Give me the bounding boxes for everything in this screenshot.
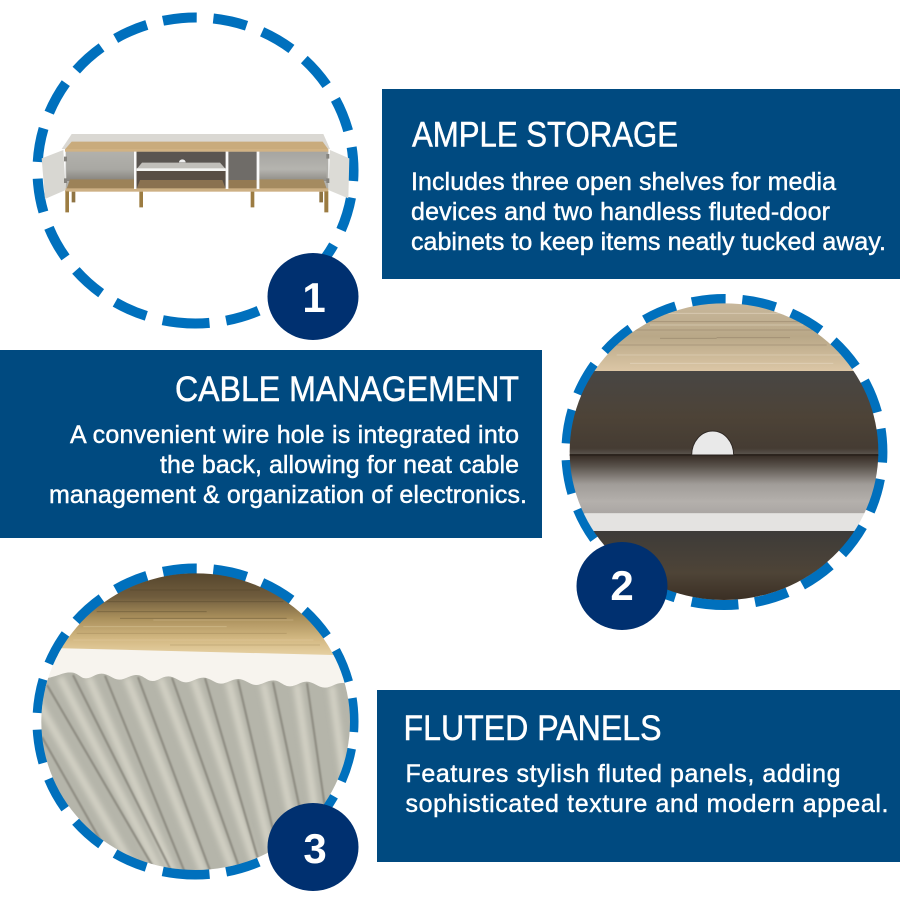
illustration: open TV stand <box>42 134 349 212</box>
text block: cable management description: A convenient wire hole is integrated into <box>70 421 519 449</box>
number badge 1 <box>268 253 358 340</box>
dashed ring: feature 2 <box>566 299 882 605</box>
wire hole <box>692 431 734 455</box>
text block: fluted panels description <box>406 760 888 818</box>
number badge 2: 2 <box>610 562 634 609</box>
illustration: wire hole close-up <box>567 302 883 601</box>
number badge 2 <box>576 542 668 630</box>
panel: cable management <box>0 350 542 538</box>
heading: fluted panels: FLUTED PANELS <box>404 709 662 748</box>
text block: ample storage description: devices and two handless fluted-door <box>411 198 830 226</box>
flute highlights <box>42 676 347 870</box>
flutes <box>41 672 350 870</box>
flute grooves <box>42 674 326 870</box>
text block: ample storage description: cabinets to keep items neatly tucked away. <box>411 228 886 256</box>
text block: ample storage description: Includes three open shelves for media <box>411 168 836 196</box>
heading: cable management: CABLE MANAGEMENT <box>175 370 519 409</box>
text block: cable management description: the back, allowing for neat cable <box>160 451 519 479</box>
text block: cable management description <box>49 421 527 509</box>
panel: ample storage <box>382 89 900 279</box>
number badge 3: 3 <box>303 825 327 872</box>
text block: fluted panels description: Features stylish fluted panels, adding <box>406 760 840 788</box>
text block: fluted panels description: sophisticated texture and modern appeal. <box>406 790 888 818</box>
text block: cable management description: management & organization of electronics. <box>49 481 527 509</box>
number badge 1: 1 <box>302 274 326 321</box>
text block: ample storage description <box>411 168 886 256</box>
dashed ring: feature 3 <box>37 568 354 875</box>
panel: fluted panels <box>377 690 900 862</box>
illustration: fluted panel close-up <box>41 573 350 870</box>
heading: ample storage: AMPLE STORAGE <box>412 116 678 154</box>
dashed ring: feature 1 <box>37 17 354 324</box>
number badge 3 <box>268 803 358 891</box>
